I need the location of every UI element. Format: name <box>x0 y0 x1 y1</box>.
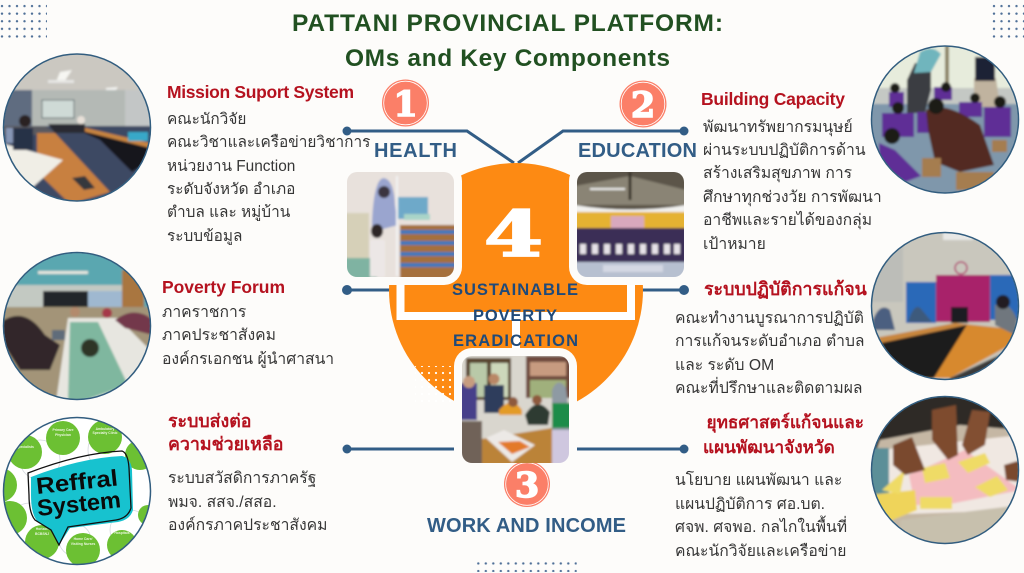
photo circle: referral system: Reffral <box>35 465 119 499</box>
connector lines <box>342 126 689 454</box>
badge 2 <box>620 80 666 128</box>
text block: poverty forum: ภาคประชาสังคม <box>162 327 276 344</box>
photo circle: referral system: Visiting Nurses <box>71 542 95 546</box>
text block: provincial strategy: แผนปฏิบัติการ ศอ.บต. <box>675 496 825 513</box>
text block: referral support: ระบบส่งต่อ <box>168 411 251 431</box>
text block: provincial strategy: นโยบาย แผนพัฒนา และ <box>675 470 842 489</box>
badge 1: 1 <box>393 84 418 125</box>
text block: mission support system: ตำบล และ หมู่บ้าน <box>167 204 291 222</box>
title: OMs and Key Components <box>345 45 670 72</box>
text block: poverty forum: Poverty Forum <box>162 277 285 297</box>
text block: poverty forum: ภาคราชการ <box>162 304 246 321</box>
central orange goal shape <box>339 163 692 471</box>
photo circle: operations meeting <box>869 230 1021 382</box>
text block: poverty forum <box>162 277 334 369</box>
badge 3: 3 <box>515 465 539 506</box>
text block: provincial strategy: แผนพัฒนาจังหวัด <box>703 437 835 457</box>
photo circle: referral system: Specialty Clinic <box>92 431 118 435</box>
text block: referral support <box>168 411 327 534</box>
photo circle: referral system: System <box>36 486 122 521</box>
badge 3 <box>504 461 550 507</box>
text block: mission support system: คณะนักวิจัย <box>167 111 246 128</box>
photo circle: referral system: Physician <box>55 433 71 437</box>
text block: building capacity: อาชีพและรายได้ของกลุ่ม <box>703 210 872 230</box>
photo circle: referral system <box>0 417 158 567</box>
photo circle: referral system: Hospitals <box>114 531 130 535</box>
text block: referral support: พมจ. สสจ./สสอ. <box>168 494 277 511</box>
text block: mission support system: ระดับจังหวัด อำเภอ <box>167 181 295 198</box>
photo circle: building capacity <box>869 44 1021 196</box>
text block: referral support: ความช่วยเหลือ <box>168 434 283 454</box>
text block: poverty operations system: คณะที่ปรึกษาและติดตามผล <box>675 376 863 397</box>
label: education: EDUCATION <box>578 140 697 162</box>
title <box>292 10 723 72</box>
photo circle: referral system: Home Care/ <box>74 537 92 541</box>
number 4: 4 <box>484 197 543 271</box>
badge 1 <box>382 80 429 126</box>
text block: poverty operations system: ระบบปฏิบัติการแก้จน <box>704 279 868 299</box>
text block: mission support system: หน่วยงาน Function <box>167 158 295 175</box>
photo circle: referral system: Primary Care <box>52 428 74 432</box>
text block: provincial strategy <box>675 412 864 560</box>
goal label: sustainable poverty eradication <box>452 281 578 350</box>
goal label: sustainable poverty eradication: ERADICATION <box>453 332 578 350</box>
text block: building capacity: ศึกษาทุกช่วงวัย การพัฒนา <box>703 189 882 207</box>
text block: mission support system: ระบบข้อมูล <box>167 228 242 246</box>
label: health: HEALTH <box>374 140 457 162</box>
text block: provincial strategy: ยุทธศาสตร์แก้จนและ <box>707 412 864 433</box>
photo circle: meeting room <box>1 51 153 205</box>
goal label: sustainable poverty eradication: POVERTY <box>473 307 557 325</box>
text block: building capacity <box>701 89 882 253</box>
photo circle: referral system: Ambulatory <box>96 427 115 431</box>
text block: mission support system: Mission Suport System <box>167 82 354 102</box>
text block: building capacity: Building Capacity <box>701 89 845 109</box>
text block: mission support system: คณะวิชาและเครือข่ายวิชาการ <box>167 133 370 151</box>
text block: poverty forum: องค์กรเอกชน ผู้นำศาสนา <box>162 350 334 369</box>
photo: education group <box>575 170 686 279</box>
text block: building capacity: ผ่านระบบปฏิบัติการด้าน <box>703 142 866 159</box>
photo circle: referral system: Horizon <box>36 527 48 531</box>
text block: poverty operations system: คณะทำงานบูรณาการปฏิบัติ <box>675 310 864 328</box>
photo: health worker with child <box>345 170 456 279</box>
text block: poverty operations system: และ ระดับ OM <box>675 357 774 374</box>
text block: poverty operations system <box>675 279 868 397</box>
text block: building capacity: เป้าหมาย <box>703 236 766 253</box>
text block: provincial strategy: คณะนักวิจัยและเครือข่าย <box>675 542 846 560</box>
text block: mission support system <box>167 82 370 246</box>
photo circle: referral system: Specialists <box>16 445 34 449</box>
photo circle: poverty forum <box>1 250 153 402</box>
text block: referral support: ระบบสวัสดิการภาครัฐ <box>168 470 316 487</box>
text block: building capacity: สร้างเสริมสุขภาพ การ <box>703 165 852 183</box>
title: PATTANI PROVINCIAL PLATFORM: <box>292 10 723 37</box>
photo: food workshop <box>460 354 571 465</box>
label: work and income: WORK AND INCOME <box>427 515 626 537</box>
text block: building capacity: พัฒนาทรัพยากรมนุษย์ <box>703 118 853 137</box>
text block: provincial strategy: ศจพ. ศจพอ. กลไกในพื้นที่ <box>675 515 847 536</box>
text block: referral support: องค์กรภาคประชาสังคม <box>168 516 327 534</box>
badge 2: 2 <box>631 85 655 126</box>
goal label: sustainable poverty eradication: SUSTAINABLE <box>452 281 578 299</box>
text block: poverty operations system: การแก้จนระดับอำเภอ ตำบล <box>675 333 865 350</box>
photo circle: referral system: BCBSNJ <box>35 532 49 536</box>
photo circle: planning workshop <box>869 395 1021 547</box>
